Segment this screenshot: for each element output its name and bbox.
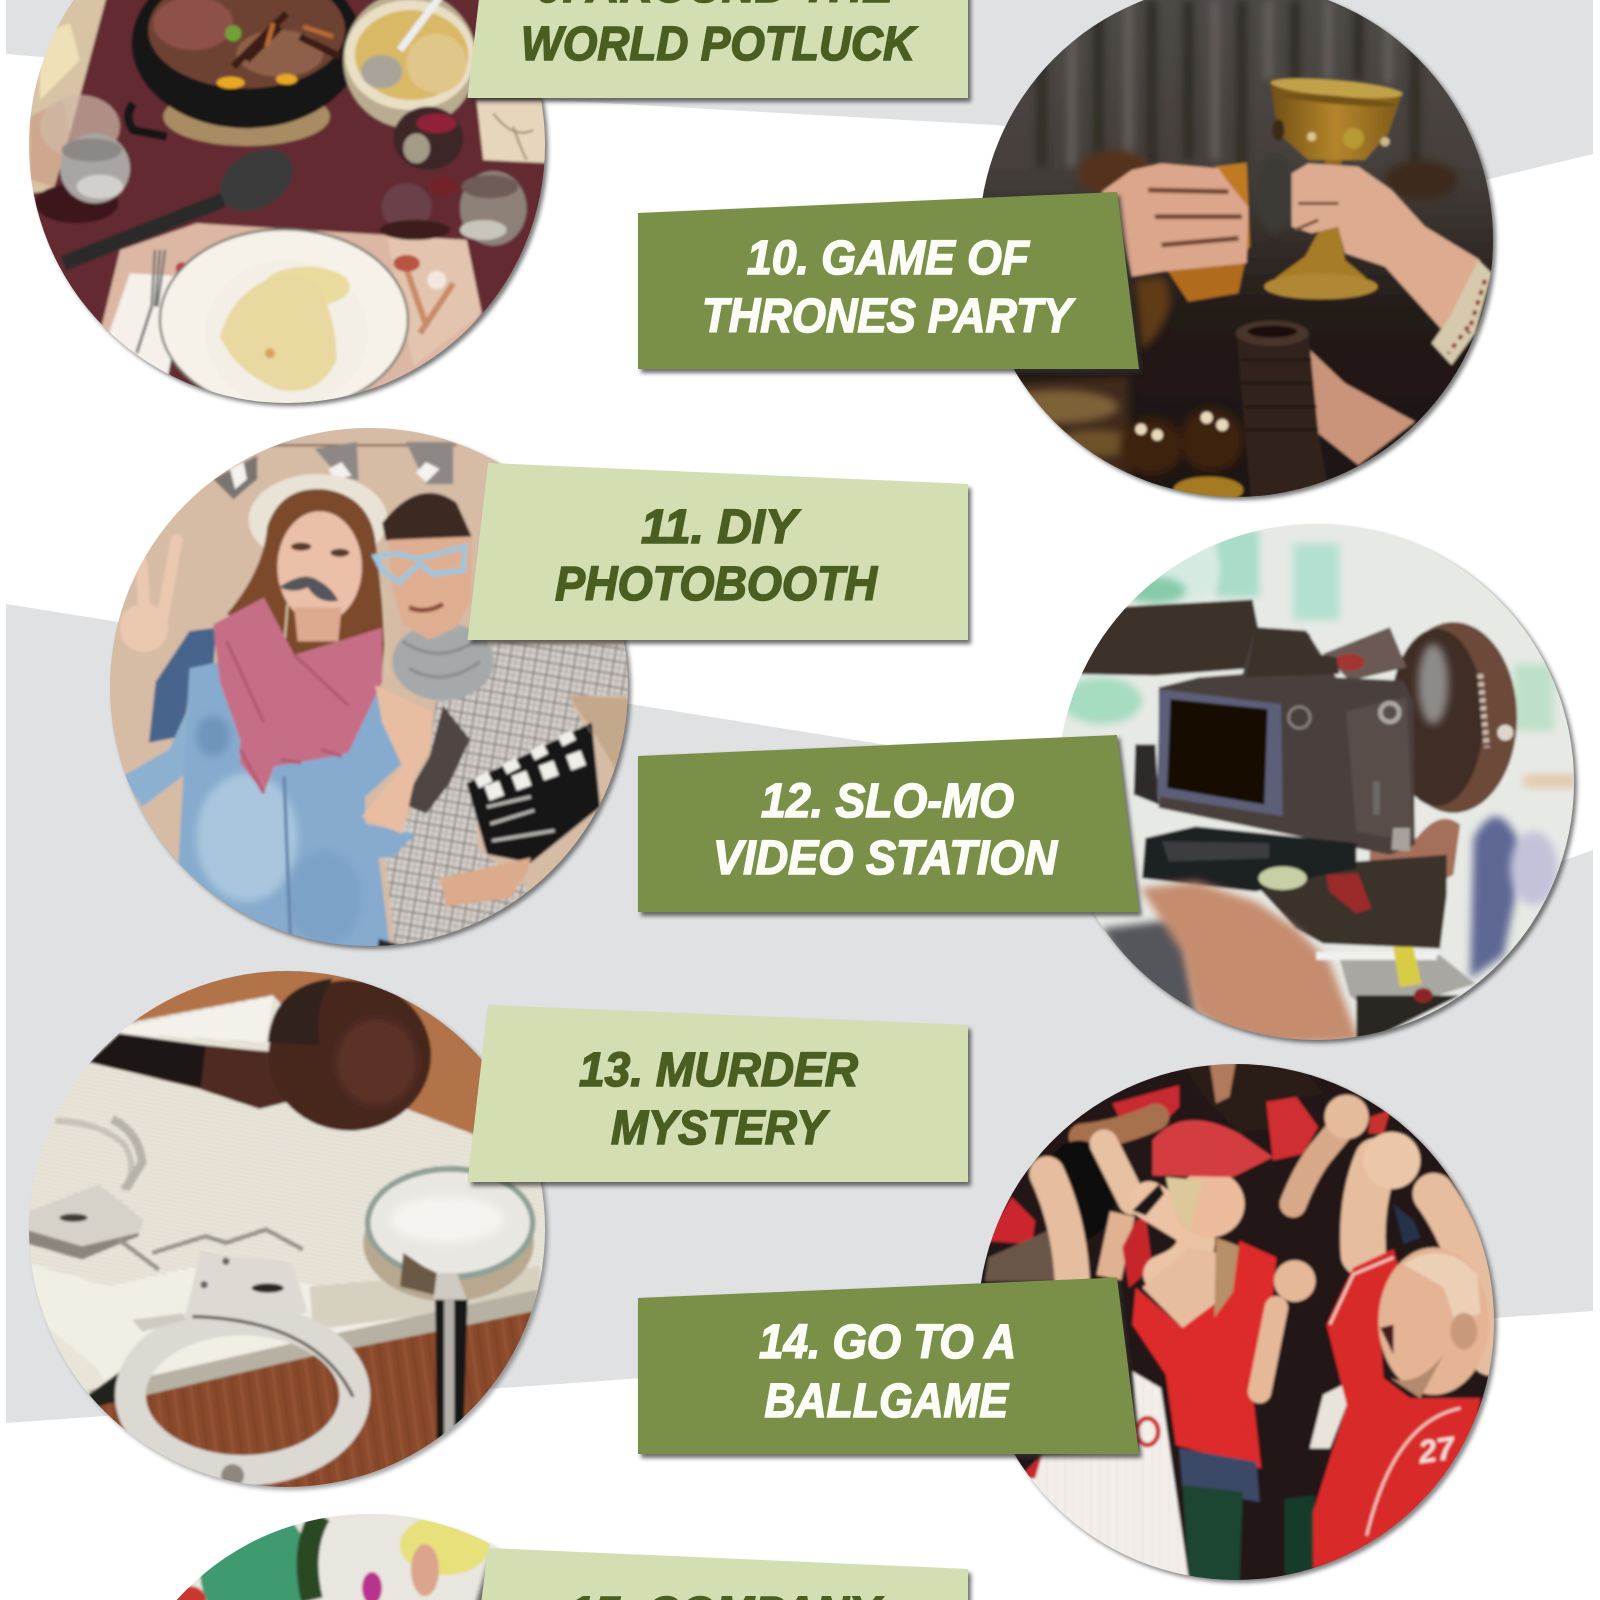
label panel: game of thrones party: THRONES PARTY — [702, 290, 1076, 343]
item 9: around the world potluck — [10, 0, 971, 430]
label panel: game of thrones party — [638, 192, 1142, 373]
label panel: go to a ballgame: BALLGAME — [764, 1375, 1010, 1428]
item 15: company party — [176, 1514, 974, 1600]
item 11: DIY photobooth — [95, 415, 971, 969]
label panel: murder mystery: 13. MURDER — [579, 1044, 858, 1097]
label panel: murder mystery — [468, 1005, 971, 1186]
label panel: DIY photobooth — [468, 463, 971, 644]
photo: cheering baseball fans: 27 — [1415, 1429, 1459, 1471]
photo: table with potluck dishes — [10, 0, 557, 430]
photo: goblet toast — [965, 0, 1512, 517]
label panel: go to a ballgame: 14. GO TO A — [759, 1316, 1016, 1369]
item 12: slo-mo video station — [638, 510, 1594, 1059]
label panel: around the world potluck: WORLD POTLUCK — [521, 18, 918, 71]
label panel: company party — [471, 1548, 971, 1600]
label panel: slo-mo video station: VIDEO STATION — [713, 832, 1058, 885]
label panel: game of thrones party: 10. GAME OF — [747, 232, 1031, 285]
item 13: murder mystery — [15, 955, 971, 1504]
label panel: slo-mo video station: 12. SLO-MO — [761, 775, 1014, 828]
label panel: DIY photobooth: 11. DIY — [641, 501, 801, 554]
photo: cheering baseball fans — [980, 1064, 1500, 1586]
item 14: go to a ballgame — [638, 1050, 1514, 1599]
label panel: murder mystery: MYSTERY — [611, 1102, 830, 1155]
label panel: DIY photobooth: PHOTOBOOTH — [555, 558, 878, 611]
photo: video camera on rig — [1062, 524, 1580, 1046]
photo: couple with photo props — [110, 428, 634, 952]
item 10: game of thrones party — [638, 0, 1512, 517]
photo: pipe, handcuffs and magnifier on a book — [15, 955, 564, 1504]
label panel: go to a ballgame — [638, 1278, 1142, 1458]
label panel: around the world potluck — [468, 0, 971, 102]
photo: office party with balloons — [176, 1514, 500, 1600]
label panel: slo-mo video station — [638, 735, 1142, 916]
